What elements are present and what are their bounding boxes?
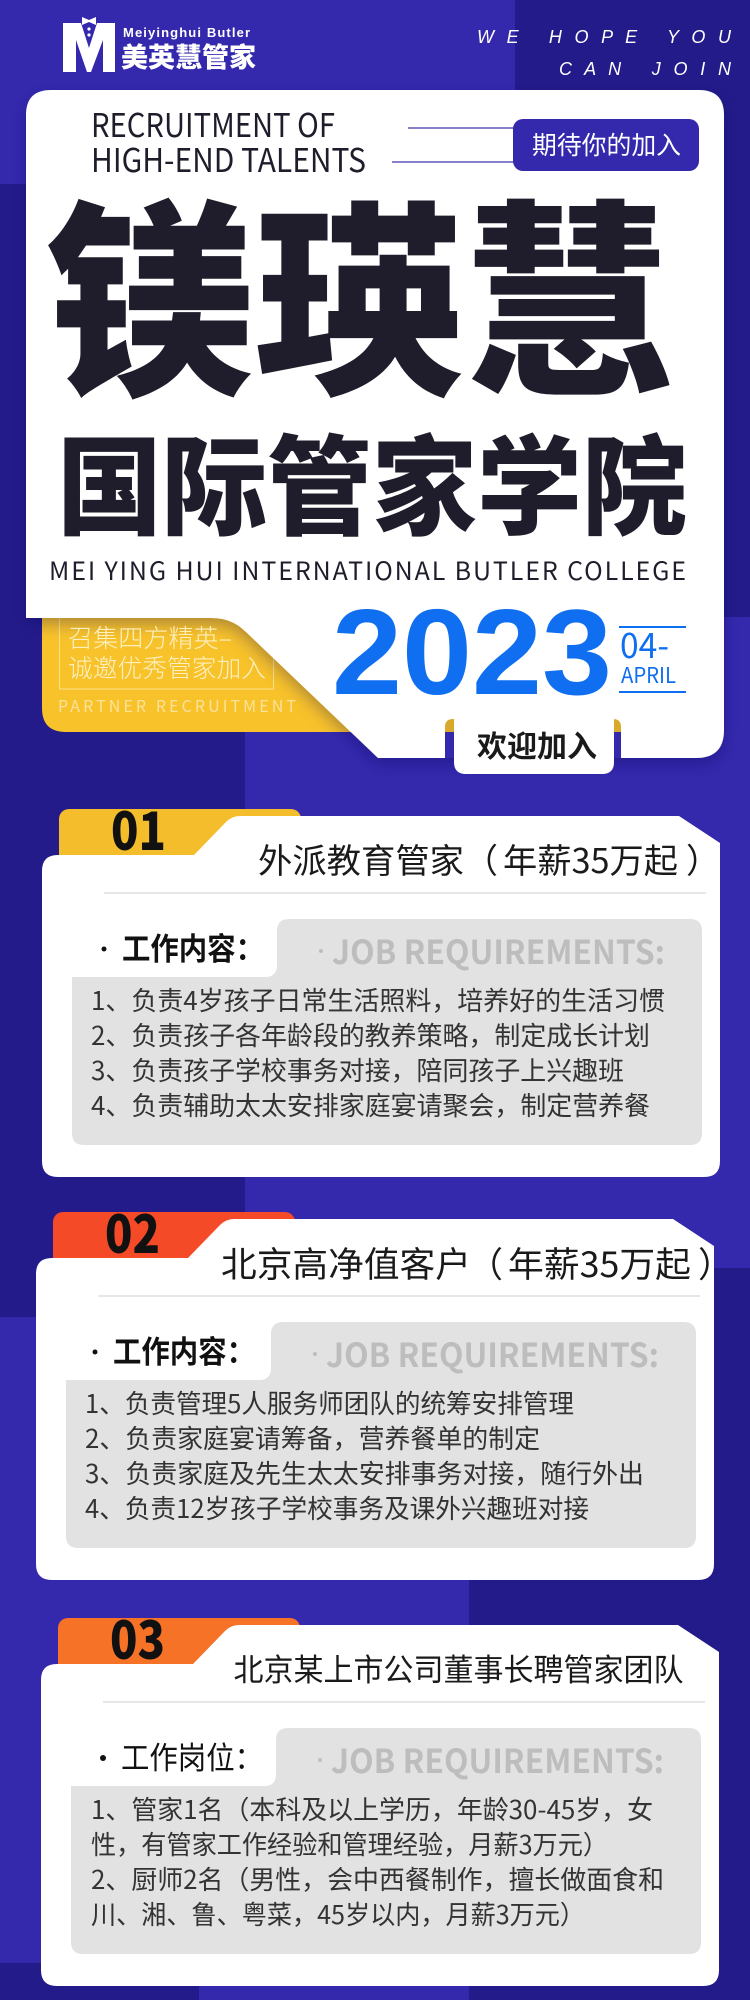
tab 03 [58,1618,300,1678]
tab 01 [59,809,301,869]
card 03 [41,1625,719,1986]
subheading 02: 工作内容： [113,1327,255,1372]
yellow banner [42,610,370,732]
grey panel 03 [71,1728,701,1954]
year: 2023 [332,584,612,720]
panel: job 03 [41,1599,719,1986]
pill: join: 期待你的加入 [532,126,681,162]
banner frame [60,610,274,689]
tagline [477,27,732,79]
panel: job 01 [42,790,720,1177]
list 03: 性，有管家工作经验和管理经验，月薪3万元） [91,1825,608,1862]
tagline: C A N J O I N [559,59,732,79]
date: 04- [620,619,669,668]
heading 01: （ [464,834,498,883]
heading 02: ） [698,1237,733,1288]
heading 02: 年薪35万起 [508,1237,691,1288]
heading 01 [258,834,720,883]
date: APRIL [621,658,676,690]
list 01: 3、负责孩子学校事务对接，陪同孩子上兴趣班 [91,1051,624,1088]
number 01: 01 [111,790,166,865]
list 02: 3、负责家庭及先生太太安排事务对接，随行外出 [85,1454,644,1491]
subheading 03: 工作岗位： [121,1733,263,1778]
icon: M with bow tie [63,17,115,72]
heading 01: ） [686,834,720,883]
banner text: 召集四方精英– [68,619,232,655]
english heading [91,99,366,182]
heading 01: 外派教育管家 [258,834,464,883]
logo chinese name: 美英慧管家 [121,36,256,75]
watermark 02: JOB REQUIREMENTS: [326,1329,659,1377]
heading 01: 年薪35万起 [503,834,678,883]
panel: job 02 [36,1193,733,1580]
list 01: 2、负责孩子各年龄段的教养策略，制定成长计划 [91,1016,650,1053]
watermark 03: JOB REQUIREMENTS: [331,1735,664,1783]
heading 02: 北京高净值客户 [221,1237,471,1288]
list 02: 1、负责管理5人服务师团队的统筹安排管理 [85,1384,574,1421]
list 03 [91,1790,664,1932]
banner text [58,619,296,717]
tab 02 [53,1212,295,1272]
list 01 [91,981,665,1123]
heading 02 [221,1237,733,1288]
list 02 [85,1384,644,1526]
list 02: 2、负责家庭宴请筹备，营养餐单的制定 [85,1419,540,1456]
watermark 01: JOB REQUIREMENTS: [332,926,665,974]
grey panel 01 [72,919,702,1145]
heading 03: 北京某上市公司董事长聘管家团队 [234,1645,684,1690]
list 01: 1、负责4岁孩子日常生活照料，培养好的生活习惯 [91,981,665,1018]
number 02: 02 [105,1193,160,1268]
subheading 01: 工作内容： [122,924,264,969]
logo english name: Meiyinghui Butler [123,25,250,40]
logo [63,17,256,75]
connector lines [392,128,515,162]
date [619,619,686,693]
grey panel 02 [66,1322,696,1548]
card 01 [42,816,720,1177]
main title: 镁瑛慧 [46,135,672,439]
list 03: 2、厨师2名（男性，会中西餐制作，擅长做面食和 [91,1860,664,1897]
hero white panel [26,90,724,758]
pill: join [513,119,699,171]
number 03: 03 [110,1599,165,1674]
banner text: PARTNER RECRUITMENT [58,693,296,717]
welcome tab: 欢迎加入 [477,722,597,766]
english heading: RECRUITMENT OF [91,99,335,147]
sub title: 国际管家学院 [57,402,687,558]
banner text: 诚邀优秀管家加入 [68,649,266,685]
list 02: 4、负责12岁孩子学校事务及课外兴趣班对接 [85,1489,589,1526]
welcome tab [445,719,621,774]
list 03: 1、管家1名（本科及以上学历，年龄30-45岁，女 [91,1790,653,1827]
english heading: HIGH-END TALENTS [91,134,366,182]
list 03: 川、湘、鲁、粤菜，45岁以内，月薪3万元） [91,1895,585,1932]
english college name: MEI YING HUI INTERNATIONAL BUTLER COLLEGE [49,552,686,588]
heading 02: （ [468,1237,503,1288]
card 02 [36,1219,714,1580]
tagline: W E H O P E Y O U [477,27,732,47]
list 01: 4、负责辅助太太安排家庭宴请聚会，制定营养餐 [91,1086,650,1123]
